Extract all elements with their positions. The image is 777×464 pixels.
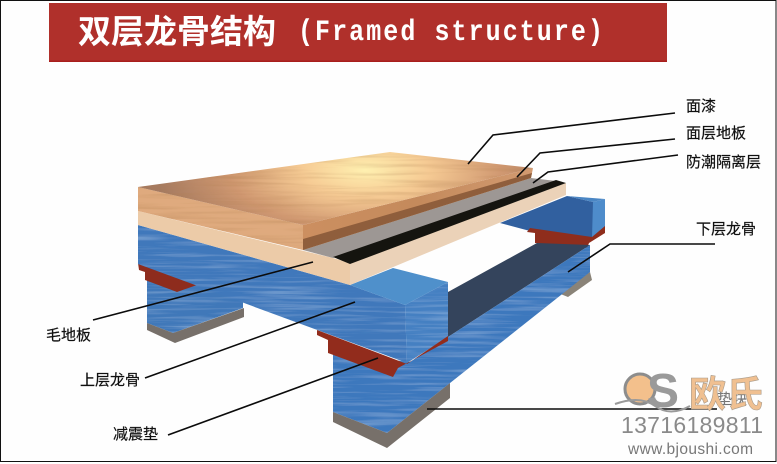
left gray pad: [147, 308, 244, 343]
logo S: S: [647, 365, 679, 418]
lower joist side face: [333, 245, 590, 433]
far upper joist: [500, 196, 605, 238]
label: 垫块: 垫块: [717, 391, 747, 408]
title banner: [49, 3, 667, 62]
wood tongue groove: [303, 173, 532, 250]
moisture barrier gray: [303, 178, 556, 258]
title text: 双层龙骨结构: [78, 13, 276, 50]
subfloor left face: [138, 211, 350, 285]
label: 面层地板: 面层地板: [686, 124, 746, 142]
wood left face: [138, 187, 303, 250]
label: 毛地板: 毛地板: [46, 326, 91, 344]
floor structure illustration: [138, 152, 605, 448]
label: 下层龙骨: 下层龙骨: [696, 221, 756, 238]
logo brand text: 欧氏: [689, 374, 763, 415]
title latin text: (Framed structure): [298, 16, 603, 50]
lower joist far gray pad: [558, 272, 592, 297]
left red pad: [138, 262, 200, 292]
subfloor right face: [350, 183, 566, 285]
moisture barrier black: [333, 180, 566, 264]
upper joist side: [138, 225, 407, 363]
wood right face: [303, 168, 533, 250]
far red pad: [527, 226, 605, 248]
label: 上层龙骨: 上层龙骨: [80, 372, 140, 389]
logo Q circle: [625, 374, 655, 404]
label: 减震垫: 减震垫: [113, 426, 158, 443]
front gray pad: [333, 383, 450, 448]
wood top: [138, 152, 533, 225]
upper joist end: [405, 282, 448, 363]
label: 防潮隔离层: 防潮隔离层: [686, 154, 761, 171]
front red pad: [317, 330, 448, 377]
label: 面漆: 面漆: [686, 98, 716, 115]
logo waves: [615, 400, 690, 412]
upper joist top: [350, 268, 448, 305]
logo watermark: [615, 365, 763, 458]
logo url: www.bjoushi.com: [627, 441, 753, 458]
lower joist top face: [448, 243, 590, 337]
left lower joist: [147, 275, 243, 333]
leader lines: [93, 113, 717, 435]
logo phone: 13716189811: [621, 412, 763, 438]
